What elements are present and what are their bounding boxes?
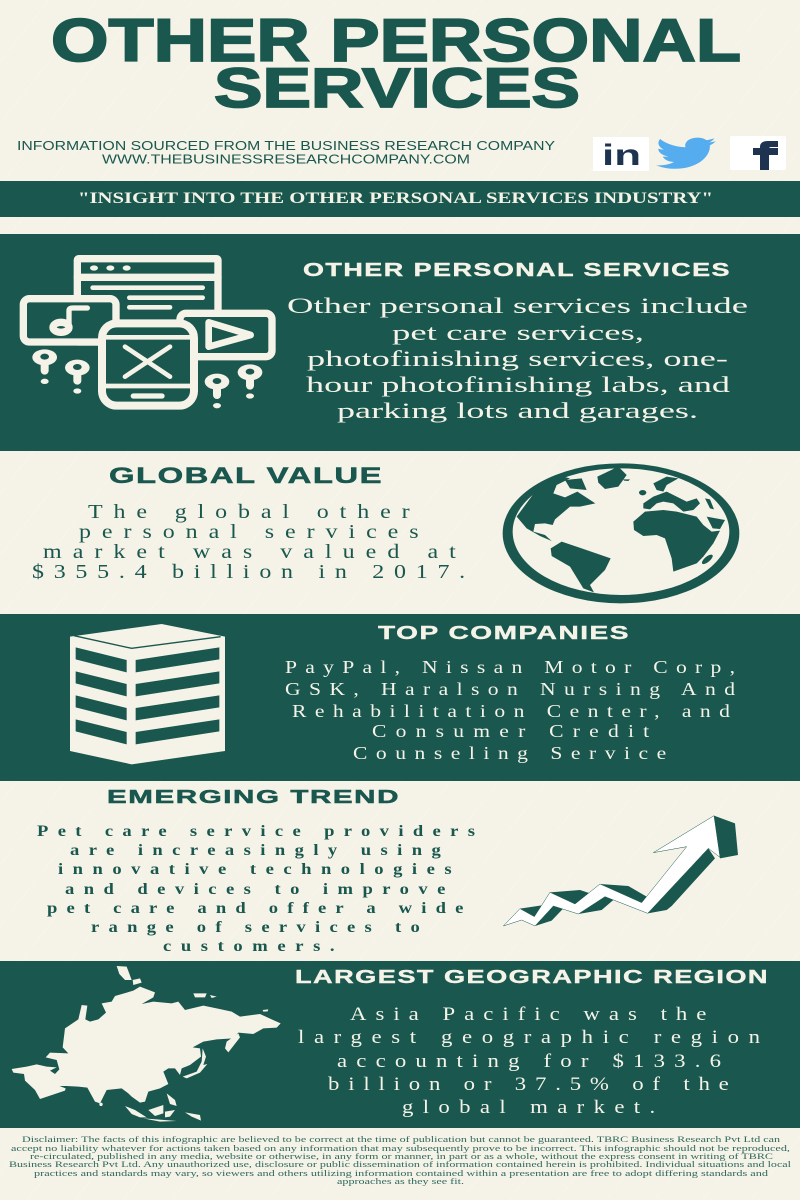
disclaimer: Disclaimer: The facts of this infographic are believed to be correct at the time of publication but cannot be guaranteed. TBRC Business Research Pvt Ltd can — [22, 1134, 781, 1144]
emerging trend text: are increasingly using — [70, 841, 441, 859]
source information: INFORMATION SOURCED FROM THE BUSINESS RESEARCH COMPANY — [17, 139, 556, 153]
icon: globe — [503, 463, 739, 603]
title: OTHER PERSONAL — [51, 7, 741, 74]
icon: facebook — [730, 136, 786, 170]
title: SERVICES — [214, 56, 580, 119]
icon: building — [70, 624, 225, 764]
top companies text: Consumer Credit — [372, 722, 650, 742]
heading: emerging trend: EMERGING TREND — [107, 786, 400, 807]
top companies text: GSK, Haralson Nursing And — [285, 680, 735, 700]
global value text: $355.4 billion in 2017. — [32, 560, 465, 583]
panel: other personal services — [0, 234, 800, 451]
largest region text: global market. — [402, 1096, 655, 1118]
disclaimer: accept no liability whatever for actions taken based on any information that may subsequently prove to be incorrect. This infographic should not be reproduced, — [11, 1143, 790, 1153]
emerging trend text: and devices to improve — [65, 880, 446, 898]
disclaimer — [9, 1134, 792, 1186]
disclaimer: approaches as they see fit. — [337, 1176, 464, 1186]
emerging trend text: customers. — [163, 937, 335, 955]
heading: top companies: TOP COMPANIES — [378, 622, 630, 643]
description text: pet care services, — [392, 320, 644, 345]
largest region text: largest geographic region — [298, 1026, 761, 1048]
disclaimer: practices and standards may vary, so viewers and others utilizing information contained within a presentation are free to adopt differing standards and — [34, 1168, 769, 1178]
panel: emerging trend — [37, 786, 738, 955]
source information: WWW.THEBUSINESSRESEARCHCOMPANY.COM — [102, 152, 470, 166]
banner: "INSIGHT INTO THE OTHER PERSONAL SERVICES INDUSTRY" — [78, 190, 713, 207]
disclaimer: re-circulated, published in any media, website or otherwise, in any form or manner, in part or as a whole, without the express consent in writing of TBRC — [30, 1151, 773, 1161]
description text: Other personal services include — [287, 293, 748, 318]
emerging trend text — [37, 822, 475, 955]
banner — [0, 181, 800, 217]
emerging trend text: range of services to — [91, 918, 420, 936]
description text: photofinishing services, one- — [307, 346, 728, 371]
top companies text: Rehabilitation Center, and — [292, 702, 730, 722]
emerging trend text: Pet care service providers — [37, 822, 475, 840]
top companies text — [285, 658, 735, 764]
largest region text: billion or 37.5% of the — [328, 1073, 729, 1095]
icon: rising arrow — [503, 816, 738, 926]
global value text: market was valued at — [43, 540, 456, 563]
icon: media devices — [23, 259, 272, 408]
heading: global value: GLOBAL VALUE — [109, 463, 383, 488]
largest region text — [298, 1003, 761, 1118]
icon: twitter — [656, 138, 716, 169]
icon: asia map — [12, 966, 281, 1122]
emerging trend text: innovative technologies — [58, 860, 452, 878]
icon: linkedin — [593, 137, 649, 172]
global value text: The global other — [88, 500, 410, 523]
top companies text: Counseling Service — [353, 744, 666, 764]
heading: other personal services: OTHER PERSONAL SERVICES — [303, 259, 731, 280]
emerging trend text: pet care and offer a wide — [47, 899, 464, 917]
description text — [287, 293, 748, 423]
icon: linkedin: in — [602, 139, 641, 172]
description text: hour photofinishing labs, and — [306, 372, 730, 397]
largest region text: accounting for $133.6 — [337, 1050, 721, 1072]
heading: largest geographic region: LARGEST GEOGRAPHIC REGION — [295, 966, 769, 987]
disclaimer: Business Research Pvt Ltd. Any unauthorized use, disclosure or public dissemination of information contained herein is prohibited. Individual situations and local — [9, 1159, 792, 1169]
global value text — [32, 500, 465, 583]
largest region text: Asia Pacific was the — [350, 1003, 706, 1025]
source information — [17, 139, 556, 166]
global value text: personal services — [79, 520, 419, 543]
panel: top companies — [0, 614, 800, 781]
panel: global value — [32, 463, 739, 603]
title — [51, 7, 741, 119]
top companies text: PayPal, Nissan Motor Corp, — [285, 658, 735, 678]
description text: parking lots and garages. — [337, 398, 698, 423]
panel: largest geographic region — [0, 961, 800, 1128]
